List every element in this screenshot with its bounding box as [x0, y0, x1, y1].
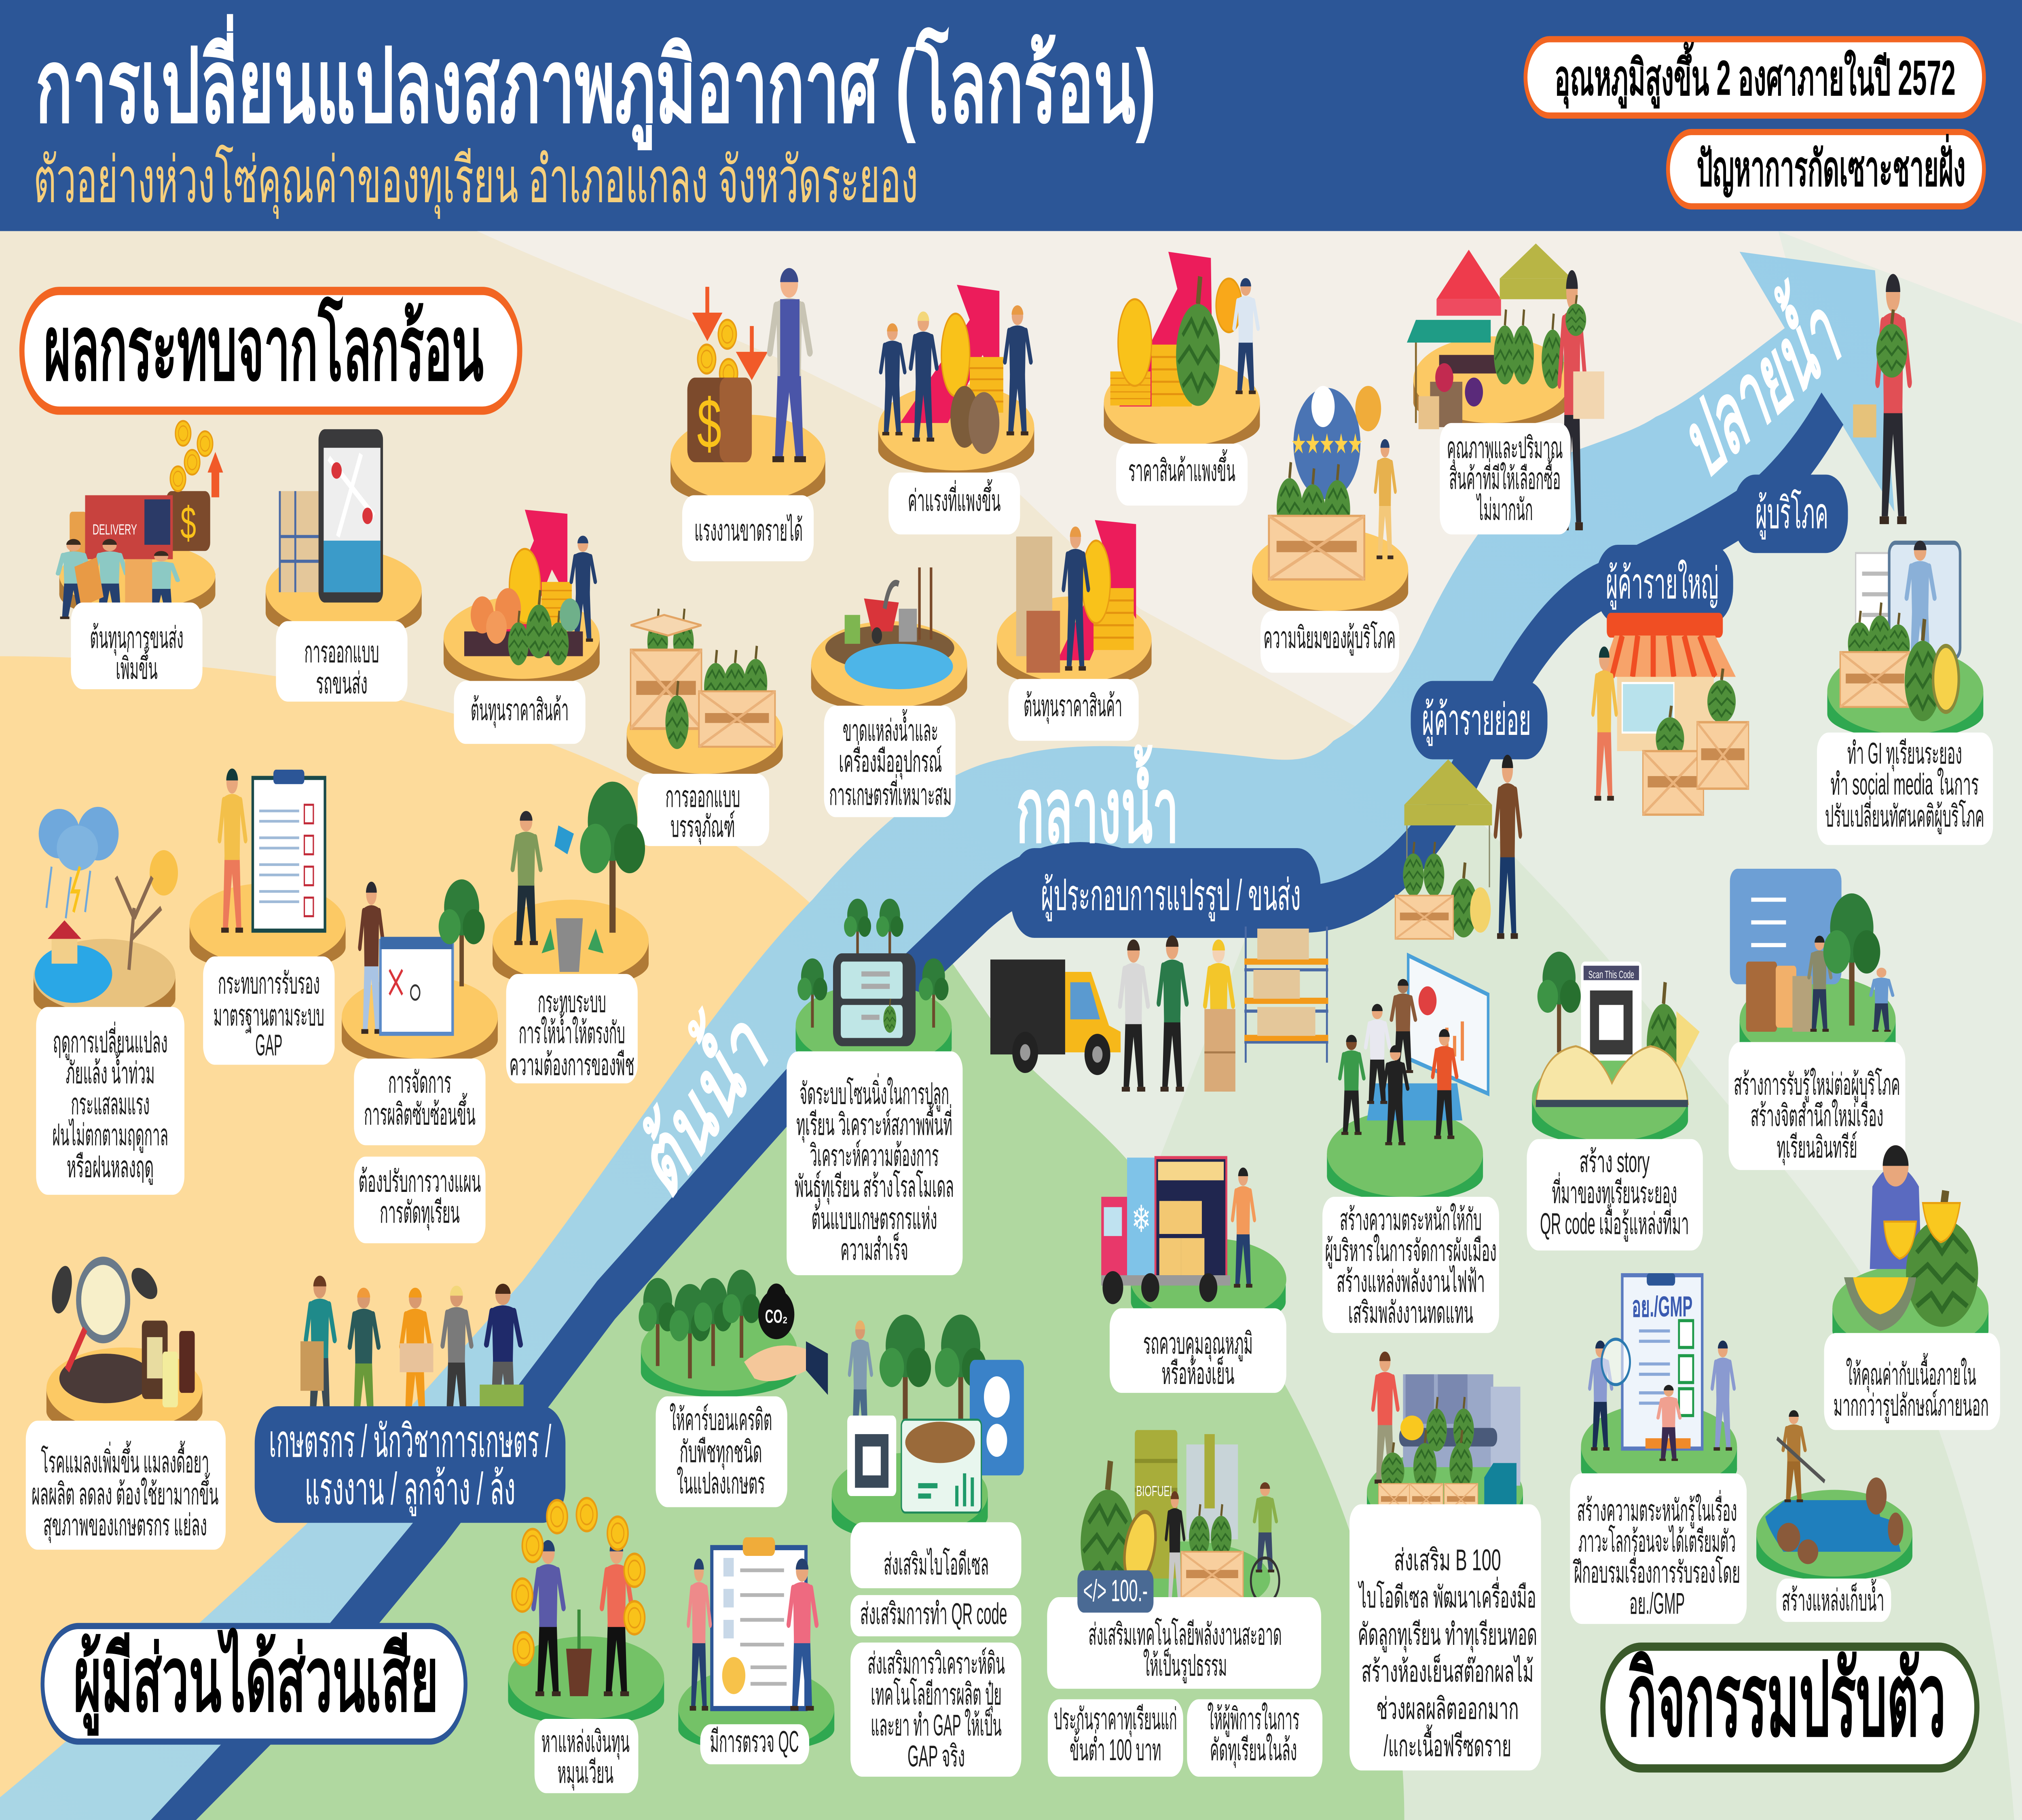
- label: สร้างความตระหนักให้กับ: [1340, 1203, 1482, 1237]
- impact: consumer preference: [1252, 386, 1408, 617]
- label: เครื่องมืออุปกรณ์: [839, 741, 942, 779]
- impact: labourers lose income: $: [697, 384, 721, 463]
- label: [888, 472, 1020, 534]
- label: [1527, 1139, 1703, 1251]
- label: การให้น้ำให้ตรงกับ: [519, 1011, 625, 1050]
- panel heading: stakeholders: ผู้มีส่วนได้ส่วนเสีย: [74, 1628, 438, 1736]
- label: GAP: [255, 1029, 282, 1062]
- title: การเปลี่ยนแปลงสภาพภูมิอากาศ (โลกร้อน): [36, 14, 1156, 150]
- badge: coastal erosion: ปัญหาการกัดเซาะชายฝั่ง: [1697, 134, 1965, 198]
- label: ที่มาของทุเรียนระยอง: [1552, 1172, 1677, 1211]
- label: การออกแบบ: [665, 780, 740, 814]
- label: ส่งเสริมการทำ QR code: [860, 1597, 1007, 1631]
- label: อย./GMP: [1629, 1587, 1685, 1621]
- label: หรือห้องเย็น: [1161, 1356, 1234, 1390]
- label: สินค้าที่มีให้เลือกซื้อ: [1449, 457, 1561, 496]
- adapt: GMP awareness: อย./GMP: [1632, 1290, 1692, 1323]
- badge: temperature: [1525, 39, 1984, 116]
- adapt: zoning tablet: [795, 899, 952, 1073]
- label: [276, 621, 408, 702]
- label: หาแหล่งเงินทุน: [541, 1725, 630, 1760]
- label: [1048, 1699, 1183, 1777]
- impact: packaging: [627, 609, 783, 780]
- label: [1440, 423, 1571, 534]
- impact: higher wages: [878, 285, 1034, 474]
- section: midstream: กลางน้ำ: [1016, 744, 1179, 861]
- label: การตัดทุเรียน: [380, 1196, 460, 1230]
- label: ไบโอดีเซล พัฒนาเครื่องมือ: [1358, 1577, 1536, 1614]
- label: [1729, 1042, 1905, 1170]
- label: พันธุ์ทุเรียน สร้างโรลโมเดล: [795, 1170, 954, 1204]
- label: ไม่มากนัก: [1476, 493, 1533, 527]
- midstream: retailer: [1395, 755, 1520, 939]
- label: ภัยแล้ง น้ำท่วม: [66, 1051, 155, 1090]
- label: [354, 1157, 486, 1243]
- adapt: story and QR book: Scan This Code: [1588, 969, 1634, 980]
- panel heading: global warming impacts: ผลกระทบจากโลกร้อน: [44, 296, 484, 399]
- stakeholders: farmers label: แรงงาน / ลูกจ้าง / ล้ง: [305, 1463, 516, 1516]
- adapt: carbon credit: CO₂: [765, 1306, 788, 1327]
- header band: [0, 0, 2022, 231]
- impact: product cost: [444, 510, 600, 687]
- label: เพิ่มขึ้น: [116, 647, 158, 686]
- label: จัดระบบโซนนิ่งในการปลูก: [799, 1073, 949, 1112]
- label: [26, 1421, 226, 1550]
- label: และยา ทำ GAP ให้เป็น: [871, 1707, 1002, 1742]
- label: ต้นทุนการขนส่ง: [90, 621, 184, 656]
- label: บรรจุภัณฑ์: [670, 810, 735, 844]
- label: ความสำเร็จ: [840, 1232, 908, 1267]
- impact: irrigation: [493, 782, 649, 988]
- label: [1349, 1504, 1541, 1771]
- label: ส่งเสริมไบโอดีเซล: [884, 1547, 989, 1581]
- impact: limited choice: [1407, 243, 1604, 530]
- label: คุณภาพและปริมาณ: [1447, 432, 1563, 466]
- label: สร้างแหล่งเก็บน้ำ: [1782, 1579, 1885, 1617]
- label: มาตรฐานตามระบบ: [214, 999, 324, 1033]
- label: แรงงานขาดรายได้: [694, 514, 803, 548]
- label: [638, 774, 769, 846]
- label: คัดทุเรียนในล้ง: [1210, 1733, 1297, 1768]
- label: ส่งเสริม B 100: [1394, 1544, 1501, 1577]
- label: การออกแบบ: [305, 636, 379, 669]
- label: [1187, 1699, 1322, 1777]
- label: สร้างห้องเย็นสต๊อกผลไม้: [1362, 1654, 1533, 1689]
- label: GAP จริง: [907, 1740, 965, 1773]
- label: การผลิตซับซ้อนขึ้น: [364, 1092, 476, 1131]
- label: ประกันราคาทุเรียนแก่: [1054, 1703, 1177, 1737]
- label: ให้ผู้พิการในการ: [1207, 1702, 1299, 1737]
- label: ให้คาร์บอนเครดิต: [670, 1403, 772, 1437]
- label: สร้าง story: [1579, 1145, 1650, 1179]
- label: คัดลูกทุเรียน ทำทุเรียนทอด: [1358, 1618, 1537, 1653]
- label: [354, 1058, 486, 1145]
- label: ส่งเสริมเทคโนโลยีพลังงานสะอาด: [1088, 1617, 1282, 1651]
- label: ทำ GI ทุเรียนระยอง: [1847, 737, 1962, 771]
- label: สร้างการรับรู้ใหม่ต่อผู้บริโภค: [1734, 1067, 1900, 1103]
- label: [787, 1051, 962, 1275]
- label: รถควบคุมอุณหภูมิ: [1143, 1327, 1253, 1361]
- midstream: wholesaler shop: [1593, 613, 1749, 815]
- label: [1009, 679, 1139, 741]
- label: กับพืชทุกชนิด: [679, 1435, 762, 1470]
- adapt: story and QR book: [1532, 952, 1700, 1145]
- label: ให้เป็นรูปธรรม: [1143, 1647, 1227, 1683]
- label: ต้นทุนราคาสินค้า: [1024, 689, 1122, 724]
- label: [656, 1397, 787, 1507]
- label: ช่วงผลผลิตออกมาก: [1376, 1692, 1519, 1726]
- stakeholders: wholesalers label: [1596, 545, 1733, 623]
- label: ทุเรียน วิเคราะห์สภาพพื้นที่: [796, 1103, 952, 1143]
- label: กระแสลมแรง: [71, 1088, 150, 1121]
- label: สร้างความตระหนักรู้ในเรื่อง: [1577, 1490, 1737, 1528]
- label: [824, 706, 956, 817]
- stakeholders: retailers label: [1411, 681, 1548, 760]
- label: โรคแมลงเพิ่มขึ้น แมลงดื้อยา: [41, 1440, 209, 1479]
- river ribbon: [151, 408, 1832, 1820]
- label: ค่าแรงที่แพงขึ้น: [908, 479, 1000, 518]
- badge: coastal erosion: [1668, 132, 1984, 206]
- label: [1110, 1308, 1286, 1393]
- label: กระทบการรับรอง: [218, 967, 320, 1000]
- label: [506, 974, 638, 1084]
- stakeholders: processors label: ผู้ประกอบการแปรรูป / ขนส่ง: [1041, 871, 1301, 922]
- impact: GAP certification: [190, 768, 346, 972]
- label: [1777, 1579, 1891, 1622]
- label: [1570, 1473, 1747, 1624]
- label: ส่งเสริมการวิเคราะห์ดิน: [867, 1647, 1005, 1680]
- label: ทำ social media ในการ: [1830, 767, 1979, 801]
- label: ฝนไม่ตกตามฤดูกาล: [52, 1118, 168, 1153]
- stakeholders: retailers label: ผู้ค้ารายย่อย: [1422, 695, 1531, 746]
- label: สร้างแหล่งพลังงานไฟฟ้า: [1337, 1265, 1485, 1299]
- label: [1817, 732, 1993, 845]
- label: ฤดูการเปลี่ยนแปลง: [53, 1021, 168, 1060]
- impact: product cost 2: [997, 520, 1152, 687]
- impact: labourers lose income: [670, 268, 825, 506]
- stakeholders: consumers label: ผู้บริโภค: [1756, 489, 1828, 540]
- label: กระทบระบบ: [538, 986, 606, 1019]
- stakeholders: processors label: [1011, 848, 1320, 938]
- label: [700, 1724, 809, 1764]
- label: การเกษตรที่เหมาะสม: [829, 774, 952, 812]
- label: [203, 957, 334, 1065]
- adapt: biodiesel and QR: [832, 1314, 1024, 1541]
- adapt: GI and social media: [1827, 541, 1983, 739]
- label: [1322, 1197, 1499, 1333]
- label: [1261, 611, 1399, 673]
- label: [71, 603, 203, 689]
- adapt: durian flesh value: [1832, 1145, 1988, 1356]
- adapt: GMP awareness: [1581, 1273, 1737, 1494]
- label: [454, 681, 586, 744]
- label: [850, 1522, 1022, 1588]
- impact: production management: [342, 879, 498, 1065]
- label: เทคโนโลยีการผลิต ปุ๋ย: [871, 1677, 1002, 1712]
- impact: transport design: [266, 429, 422, 638]
- label: ขั้นต่ำ 100 บาท: [1070, 1728, 1161, 1767]
- label: ภาวะโลกร้อนจะได้เตรียมตัว: [1578, 1525, 1736, 1559]
- adapt: cold truck: [1101, 1158, 1286, 1327]
- label: [1824, 1333, 2000, 1430]
- adapt: water storage: [1756, 1410, 1912, 1581]
- adapt: B100 processing: [1367, 1352, 1523, 1539]
- label: ทุเรียนอินทรีย์: [1777, 1131, 1857, 1165]
- adapt: urban planning meeting: [1327, 955, 1488, 1201]
- adapt: funding: [508, 1498, 664, 1725]
- label: ราคาสินค้าแพงขึ้น: [1128, 449, 1235, 488]
- label: ต้องปรับการวางแผน: [358, 1165, 481, 1198]
- impact: climate change: [34, 807, 178, 1022]
- label: ผลผลิต ลดลง ต้องใช้ยามากขึ้น: [32, 1472, 218, 1511]
- label: ขาดแหล่งน้ำและ: [843, 709, 938, 747]
- midstream: truck and workers: [990, 927, 1328, 1092]
- label: มีการตรวจ QC: [710, 1725, 799, 1759]
- label: รถขนส่ง: [316, 667, 368, 700]
- badge: price 100: </> 100.-: [1083, 1573, 1148, 1608]
- label: ในแปลงเกษตร: [677, 1466, 765, 1500]
- label: วิเคราะห์ความต้องการ: [810, 1139, 939, 1172]
- adapt: organic awareness: [1730, 869, 1896, 1067]
- label: QR code เมื่อรู้แหล่งที่มา: [1540, 1203, 1689, 1242]
- impact: pests: [47, 1261, 203, 1436]
- impact: rising prices: [1104, 252, 1260, 450]
- label: ต้นทุนราคาสินค้า: [471, 694, 569, 728]
- label: การจัดการ: [388, 1066, 451, 1099]
- label: สุขภาพของเกษตรกร แย่ลง: [43, 1509, 207, 1543]
- stakeholders: farmers group: [300, 1276, 524, 1424]
- label: ฝึกอบรมเรื่องการรับรองโดย: [1573, 1552, 1740, 1589]
- label: [535, 1719, 638, 1793]
- stakeholders: farmers label: [255, 1406, 565, 1523]
- label: [682, 495, 814, 561]
- label: ความต้องการของพืช: [510, 1048, 635, 1082]
- adapt: clean energy: BIOFUEL: [1136, 1484, 1175, 1499]
- section: downstream: ปลายน้ำ: [1670, 256, 1851, 501]
- impact: water and tools: [811, 567, 967, 712]
- badge: temperature: อุณหภูมิสูงขึ้น 2 องศาภายในปี 2572: [1555, 42, 1956, 109]
- stakeholders: consumers label: [1733, 474, 1848, 553]
- subtitle: ตัวอย่างห่วงโซ่คุณค่าของทุเรียน อำเภอแกลง จังหวัดระยอง: [34, 144, 918, 219]
- label: ผู้บริหารในการจัดการผังเมือง: [1325, 1234, 1497, 1269]
- section: upstream: ต้นน้ำ: [622, 972, 780, 1219]
- label: ต้นแบบเกษตรกรแห่ง: [812, 1202, 937, 1236]
- stakeholders: wholesalers label: ผู้ค้ารายใหญ่: [1606, 559, 1719, 610]
- stakeholders: farmers label: เกษตรกร / นักวิชาการเกษตร /: [269, 1416, 551, 1467]
- adapt: carbon credit: [639, 1270, 828, 1397]
- label: [1116, 444, 1248, 506]
- adapt: cold truck: ❄: [1132, 1199, 1151, 1240]
- adapt: QC: [678, 1537, 834, 1752]
- impact: consumer preference: ★★★★★: [1292, 432, 1362, 457]
- adapt: clean energy: [1081, 1430, 1279, 1616]
- label: หมุนเวียน: [557, 1756, 613, 1790]
- label: /แกะเนื้อฟรีซดราย: [1384, 1724, 1511, 1763]
- label: เสริมพลังงานทดแทน: [1348, 1296, 1473, 1329]
- impact: transport cost: $: [180, 497, 196, 548]
- label: [850, 1642, 1022, 1777]
- impact: transport cost: DELIVERY: [93, 522, 137, 538]
- icon: consumer woman: [1853, 274, 1910, 524]
- label: [36, 1007, 184, 1195]
- label: [850, 1595, 1022, 1636]
- label: หรือฝนหลงฤดู: [67, 1151, 154, 1185]
- label: สร้างจิตสำนึกใหม่เรื่อง: [1751, 1095, 1883, 1133]
- label: [1047, 1597, 1321, 1689]
- label: ความนิยมของผู้บริโภค: [1263, 621, 1396, 656]
- impact: transport cost: [58, 421, 223, 619]
